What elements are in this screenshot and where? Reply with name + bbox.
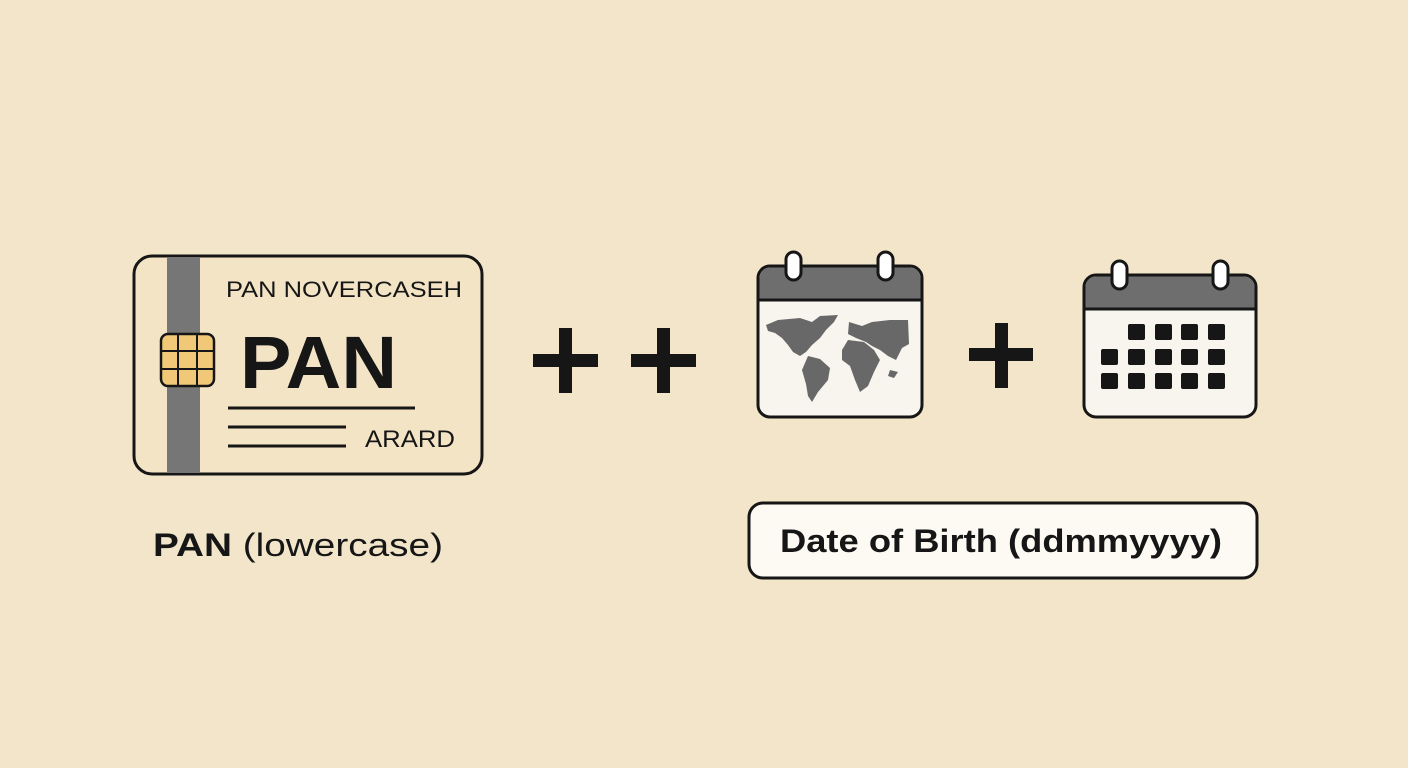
icon: plus 2 [631,328,696,393]
world map [766,315,909,402]
label box: Date of Birth [749,503,1257,578]
icon: chip [161,334,214,386]
icon: plus 1 [533,328,598,393]
panel: PAN card [134,256,482,474]
icon: calendar with grid [1084,261,1256,417]
label box: Date of Birth: Date of Birth (ddmmyyyy) [780,523,1222,559]
card big text: PAN [240,321,397,404]
label: PAN (lowercase): PAN (lowercase) [153,527,443,563]
card lines [228,408,415,446]
day grid [1101,324,1225,389]
icon: plus 3 [969,323,1033,388]
icon: calendar with world map [758,252,922,417]
card stripe [167,257,200,473]
card header text: PAN NOVERCASEH [226,277,462,302]
card footer text: ARARD [365,426,455,453]
